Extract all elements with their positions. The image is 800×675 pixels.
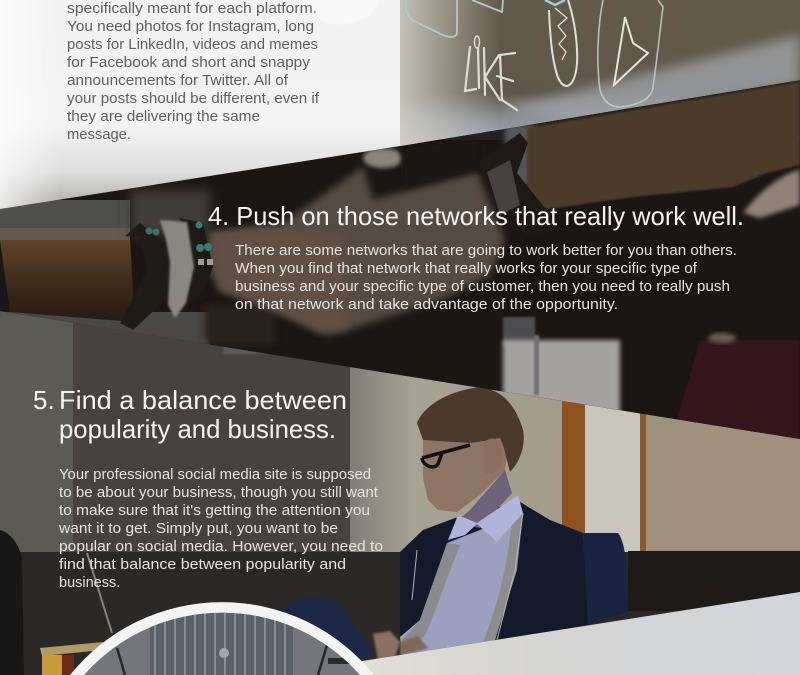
text block: tip 5 body: to make sure that it's getting the attention you (59, 503, 370, 519)
text block: tip 3 body: posts for LinkedIn, videos and memes (67, 37, 318, 53)
text block: tip 5 body (58, 467, 383, 591)
handshake arms (0, 82, 800, 333)
text block: tip 4 body: business and your specific type of customer, then you need to really push (235, 279, 730, 295)
text block: tip 5 body: Your professional social media site is supposed (59, 467, 371, 483)
text block: tip 5 body: find that balance between popularity and (59, 557, 346, 573)
icon: sketched LIKE word (465, 36, 517, 110)
heading: tip 5: Find a balance between (59, 385, 347, 415)
text block: tip 3 body: your posts should be different, even if (67, 91, 320, 107)
heading: tip 5: 5. (33, 385, 55, 415)
text block: tip 3 body: they are delivering the same (67, 109, 260, 125)
text block: tip 3 body: for Facebook and short and snappy (67, 55, 311, 71)
text block: tip 4 body: When you find that network that really works for your specific type of (235, 261, 698, 277)
text block: tip 5 body: business. (59, 575, 120, 591)
icon: wristwatch (480, 133, 546, 215)
panel: person at sofa photo (0, 300, 800, 675)
icon: sketched play button (598, 0, 663, 107)
panel: top paper background (0, 0, 800, 210)
icon: beaded bracelets (120, 218, 213, 330)
text block: tip 4 body: There are some networks that are going to work better for you than others. (235, 243, 737, 259)
text block: tip 4 body: on that network and take advantage of the opportunity. (235, 297, 618, 313)
text block: tip 5 body: want it to get. Simply put, you want to be (58, 521, 338, 537)
panel: handshake dark photo (0, 82, 800, 450)
text block: tip 3 body: message. (67, 127, 131, 143)
person: seated man with glasses (283, 388, 628, 675)
text block: tip 3 body: specifically meant for each platform. (67, 1, 317, 17)
icon: sketched feather pen (545, 0, 577, 86)
icon: sketched rounded square (406, 0, 503, 37)
text block: tip 3 body: announcements for Twitter. All of (67, 73, 289, 89)
text block: tip 5 body: to be about your business, though you still want (59, 485, 378, 501)
panel: whiteboard sketch photo (400, 0, 800, 150)
text block: tip 3 body: You need photos for Instagram, long (67, 19, 314, 35)
heading: tip 5: popularity and business. (59, 414, 336, 444)
text block: tip 3 body (67, 1, 320, 143)
text block: tip 5 body: popular on social media. However, you need to (59, 539, 383, 555)
panel: bottom light section (275, 592, 800, 675)
icon: circular portrait with white ring (70, 602, 374, 675)
heading: tip 4: 4. Push on those networks that really work well. (208, 201, 744, 231)
heading: tip 5 (33, 385, 347, 444)
text block: tip 4 body (235, 243, 737, 313)
